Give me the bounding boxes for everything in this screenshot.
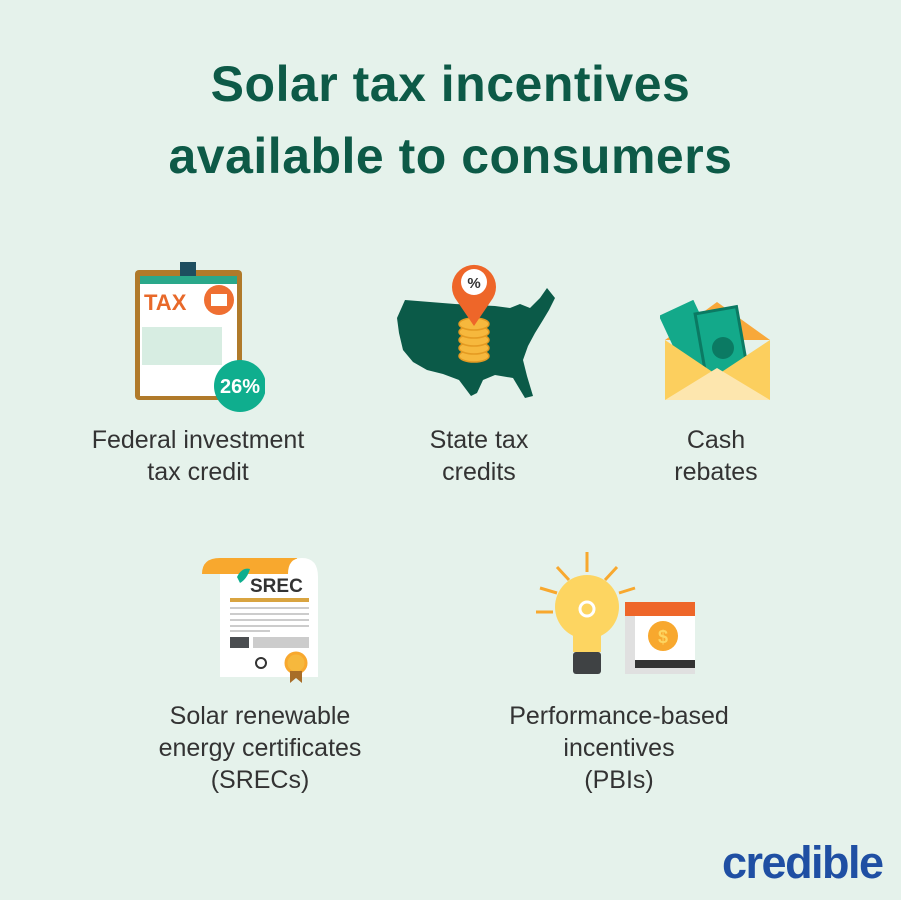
icon: tax clipboard [135, 262, 265, 412]
icon: SREC certificate: SREC [250, 576, 303, 597]
text: federal [92, 426, 304, 486]
text: cash: Cash [687, 426, 745, 454]
text: SRECs: Solar renewable [170, 702, 350, 730]
icon: tax clipboard: 26% [220, 376, 260, 398]
text: PBIs: incentives [563, 734, 675, 762]
title: available to consumers [168, 128, 732, 184]
text: PBIs: Performance-based [509, 702, 729, 730]
logo: credible: credible [722, 837, 883, 888]
icon: tax clipboard: TAX [144, 290, 187, 315]
text: federal: tax credit [147, 458, 249, 486]
text: SRECs: energy certificates [159, 734, 361, 762]
icon: cash envelope [660, 300, 770, 400]
icon: US map with pin [397, 264, 555, 398]
text: state [430, 426, 528, 486]
text: SRECs: (SRECs) [211, 766, 309, 794]
text: cash: rebates [674, 458, 758, 486]
text: PBIs [509, 702, 729, 794]
text: SRECs [159, 702, 361, 794]
text: federal: Federal investment [92, 426, 304, 454]
text: PBIs: (PBIs) [584, 766, 654, 794]
text: cash [674, 426, 758, 486]
icon: SREC certificate [202, 558, 318, 683]
icon: lightbulb and calendar [536, 552, 695, 674]
title [168, 56, 732, 184]
text: state: credits [442, 458, 516, 486]
title: Solar tax incentives [211, 56, 690, 112]
text: state: State tax [430, 426, 528, 454]
icon: US map with pin: % [467, 275, 481, 292]
icon: lightbulb and calendar: $ [658, 627, 668, 647]
